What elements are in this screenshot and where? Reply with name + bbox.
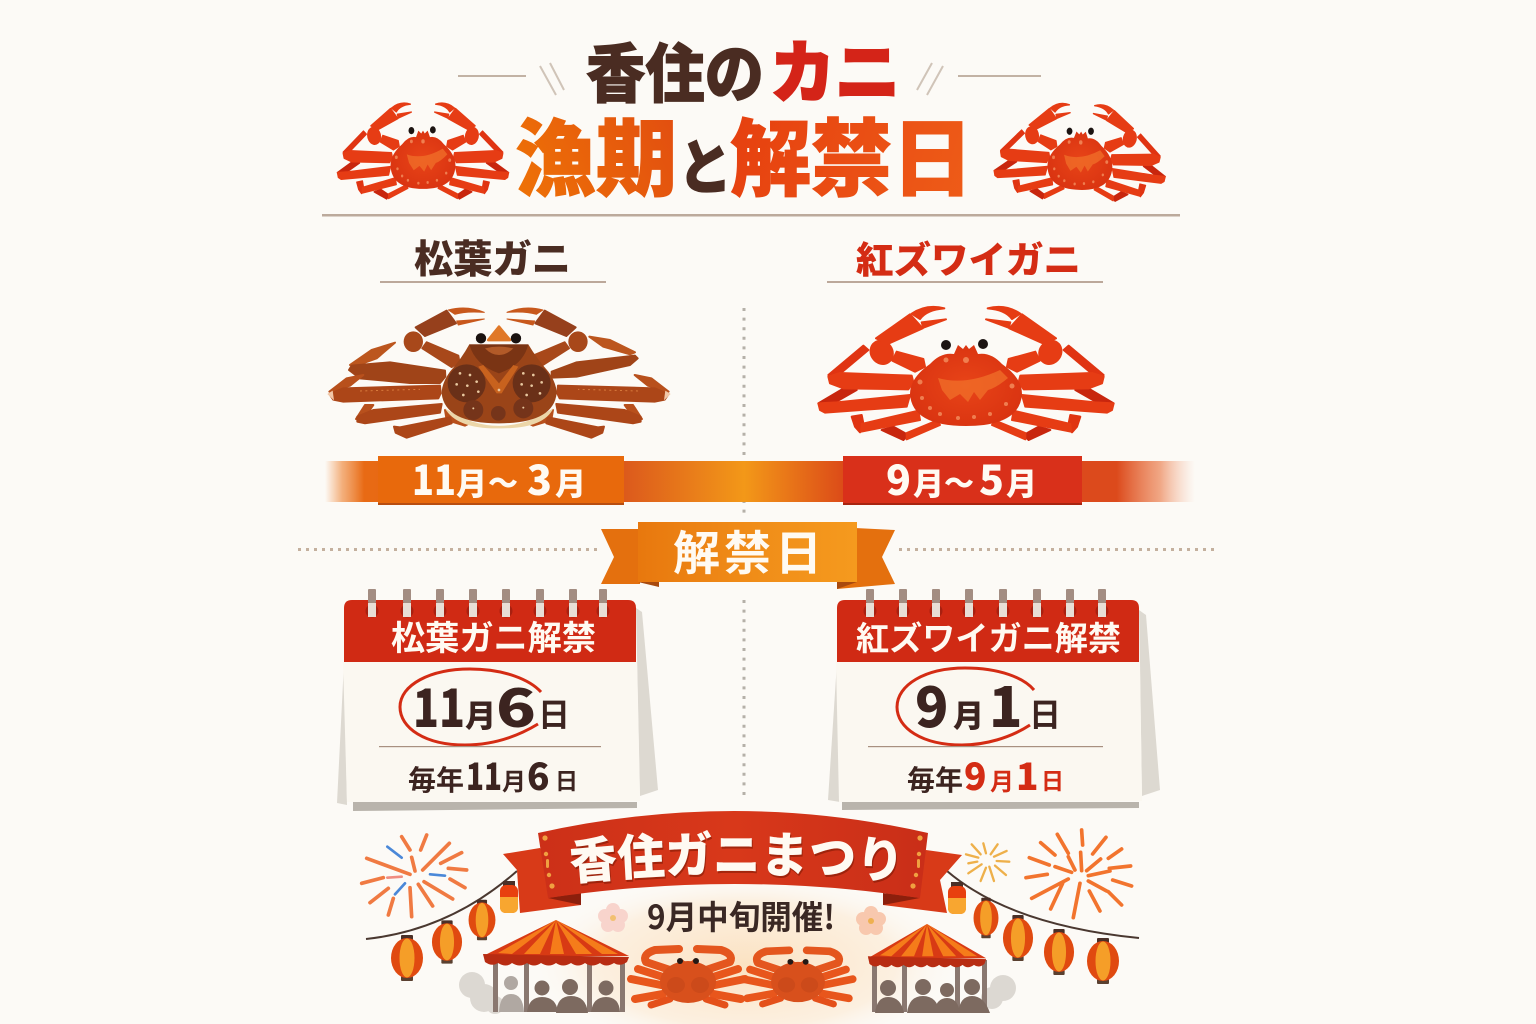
divider: [868, 746, 1103, 747]
date: 9/1: 月: [953, 691, 984, 736]
icon: flower right: [856, 906, 886, 935]
calendar shadow: [842, 802, 1139, 810]
season pill: red snow: [843, 447, 1082, 507]
season pill: matsuba: 月: [456, 459, 487, 504]
icon: red snow crab: [818, 307, 1114, 440]
season band: [325, 461, 1195, 502]
season pill: red snow: 9: [886, 447, 911, 507]
annual date: 11: [466, 747, 502, 801]
date: 11/6: 11: [413, 667, 465, 742]
smoke: [981, 975, 1016, 1009]
lantern: [432, 920, 462, 964]
calendar: red snow: [828, 589, 1160, 810]
date: 9/1: 9: [915, 663, 948, 743]
calendar: matsuba: [337, 589, 658, 811]
banner title: 香住ガニまつり: [570, 830, 897, 886]
divider: [379, 746, 601, 747]
annual date: 6: [527, 747, 550, 801]
title decoration: left: [458, 63, 564, 95]
date: 9/1: [915, 663, 1061, 743]
banner dots: [542, 835, 923, 889]
title rule: [322, 214, 1180, 216]
season pill: red snow: 〜: [944, 459, 974, 503]
season pill: matsuba: [378, 447, 624, 507]
banner right tail: [883, 850, 962, 913]
calendar rings: [366, 589, 610, 618]
calendar back pages: [337, 608, 658, 805]
tent posts: [872, 960, 987, 1012]
tent roof: [483, 920, 629, 966]
fireworks right: [966, 830, 1132, 918]
title line 1: 香住の: [586, 24, 764, 116]
calendar header: [837, 600, 1139, 662]
annual date: 9: [964, 747, 987, 801]
lantern: [1044, 929, 1074, 975]
season pill: matsuba: 月: [555, 459, 586, 504]
lantern: [974, 898, 998, 938]
title line 2: particle: と: [678, 120, 732, 207]
heading: red snow crab: 紅ズワイガニ: [856, 230, 1081, 284]
lantern: [469, 900, 495, 940]
small lantern: [500, 881, 518, 913]
annual date: 日: [555, 762, 578, 796]
season pill: red snow: 月: [1006, 459, 1037, 504]
small lantern: [948, 882, 966, 914]
hand-drawn circle stroke: [400, 669, 541, 745]
calendar header text: 松葉ガニ解禁: [391, 611, 596, 660]
calendar header: [344, 600, 636, 662]
ribbon: opening day: [601, 515, 895, 589]
title line 2: fishing season: 漁期: [515, 93, 677, 214]
ribbon: opening day: 解禁日: [673, 515, 822, 584]
season pill: matsuba: 〜: [488, 459, 518, 503]
calendar rings: [864, 589, 1108, 618]
icon: festival crab one: [631, 949, 745, 1005]
title: [458, 18, 1041, 214]
center dotted divider: [742, 308, 746, 800]
annual date: 日: [1041, 762, 1064, 796]
annual date: 毎年: [408, 759, 464, 799]
date: 9/1: 日: [1029, 690, 1061, 736]
date: 11/6: 日: [538, 690, 570, 736]
banner left tail: [503, 848, 581, 913]
annual date: [408, 747, 578, 801]
date: 11/6: [413, 667, 570, 742]
title accent: kani: カニ: [770, 18, 900, 117]
icon: small crab right: [993, 101, 1168, 203]
lantern string right: [947, 871, 1139, 984]
title decoration: right: [917, 63, 1041, 95]
crowd: [875, 979, 990, 1013]
lantern string left: [366, 871, 518, 981]
crowd: [499, 976, 620, 1013]
season pill: red snow: 5: [979, 447, 1004, 507]
icon: festival crab two: [743, 950, 853, 1004]
festival date: 9月中旬開催!: [647, 891, 835, 939]
festival warm wash: [530, 865, 960, 1024]
festival tent right: [868, 924, 1016, 1013]
icon: matsuba crab: [327, 308, 671, 438]
date: 11/6: 6: [496, 667, 536, 742]
hand-drawn circle stroke: [897, 668, 1034, 745]
tent roof: [868, 924, 986, 967]
calendar header text: 紅ズワイガニ解禁: [856, 612, 1121, 660]
festival banner: [503, 811, 962, 913]
lantern: [391, 935, 423, 981]
season pill: red snow: 月: [913, 459, 944, 504]
annual date: 1: [1016, 747, 1039, 801]
icon: flower left: [598, 903, 628, 932]
heading: matsuba crab: 松葉ガニ: [414, 229, 571, 285]
fireworks left: [362, 835, 467, 917]
title line 2: opening day: 解禁日: [730, 93, 973, 214]
banner main: [538, 811, 928, 898]
festival tent left: [459, 920, 629, 1014]
calendar page: [343, 662, 640, 802]
annual date: 月: [502, 762, 526, 797]
season pill: matsuba: 11: [412, 447, 456, 507]
season pill: matsuba: 3: [527, 447, 552, 507]
icon: small crab left: [337, 103, 509, 199]
lantern: [1003, 915, 1033, 961]
tent posts: [493, 962, 625, 1012]
opening-day dotted rules: [298, 548, 1218, 551]
annual date: 月: [990, 762, 1014, 797]
smoke: [459, 972, 504, 1014]
date: 11/6: 月: [465, 691, 496, 736]
date: 9/1: 1: [989, 663, 1022, 743]
calendar shadow: [353, 802, 637, 811]
lantern: [1087, 938, 1119, 984]
annual date: [907, 747, 1064, 801]
annual date: 毎年: [907, 759, 963, 799]
calendar page: [836, 662, 1142, 802]
calendar back pages: [828, 610, 1160, 802]
